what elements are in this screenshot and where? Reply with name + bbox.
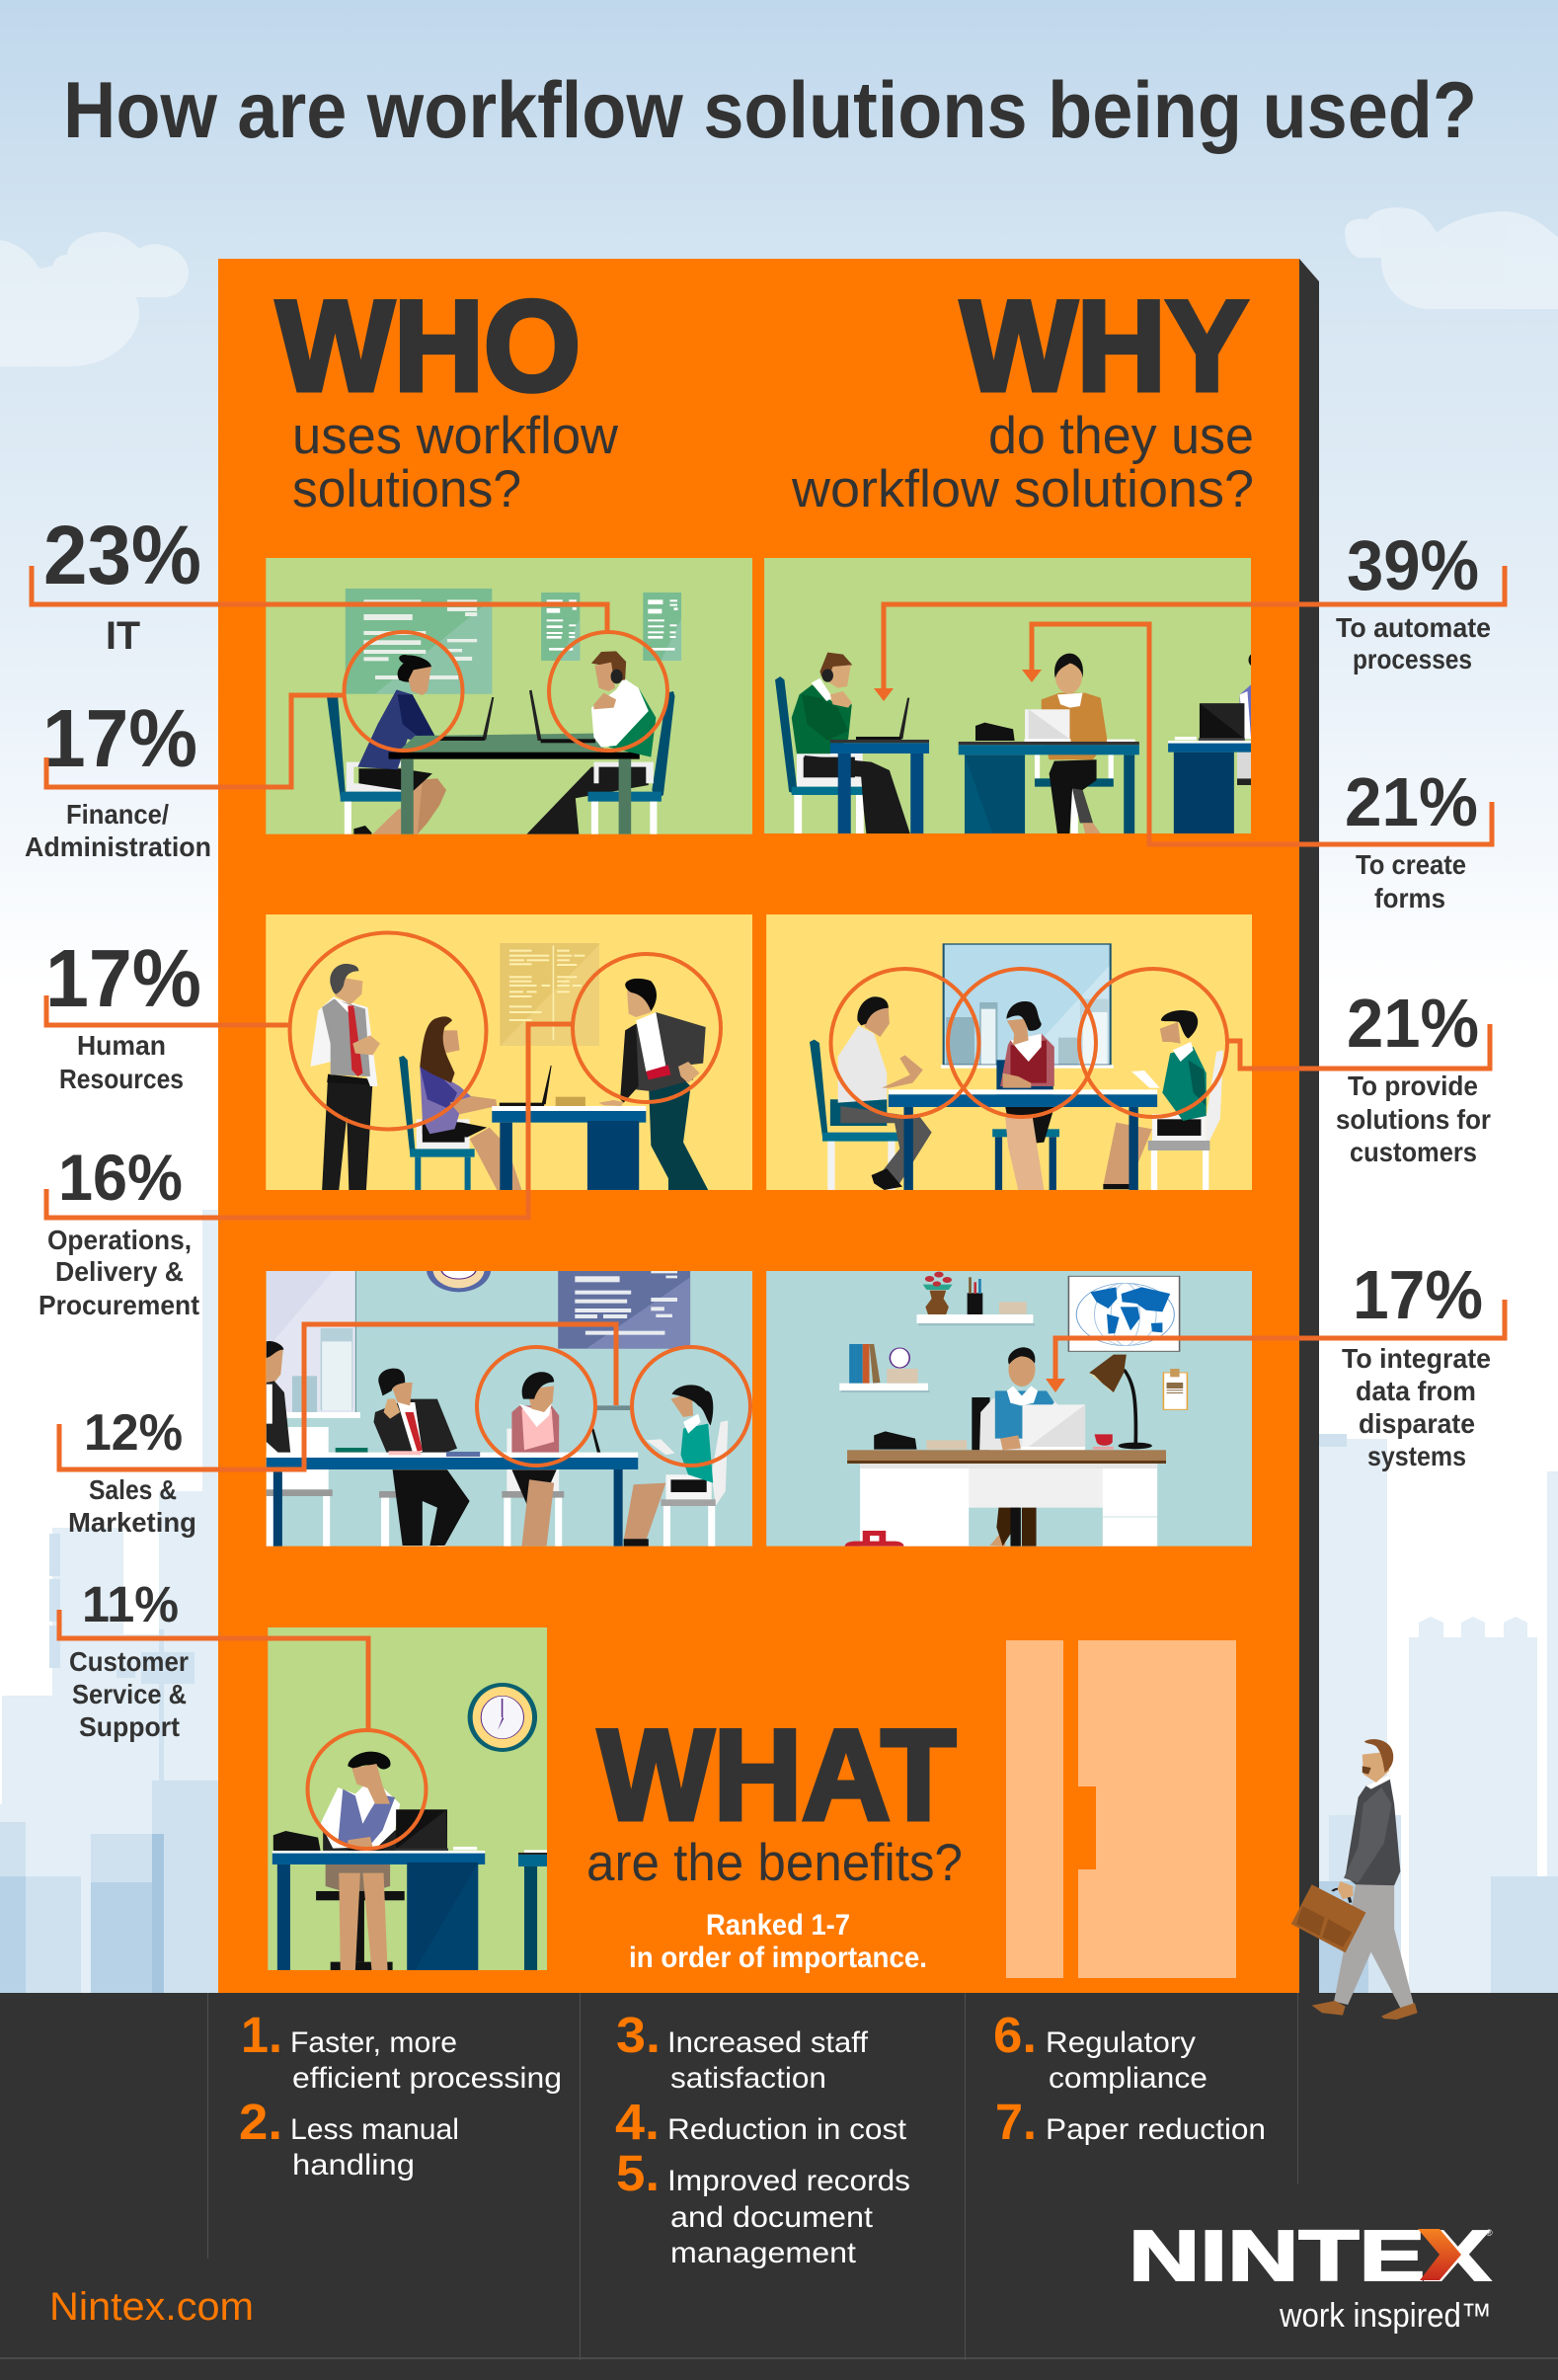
website link: Nintex.com: [49, 2285, 254, 2329]
benefits column 2: Increased staff: [667, 2026, 869, 2059]
stat: 11% customer service: [69, 1576, 189, 1742]
stat: 11% customer service: Support: [79, 1711, 180, 1742]
man thinking: [379, 1491, 397, 1498]
benefits column 1: Faster, more: [290, 2026, 457, 2059]
stat: 21% forms: forms: [1374, 883, 1445, 913]
woman centre: [996, 1060, 1053, 1094]
stat: 11% customer service: Customer: [69, 1646, 189, 1677]
footer band: [0, 1993, 1558, 2380]
stat: 17% human resources: Resources: [59, 1064, 184, 1094]
red bag: [863, 1531, 886, 1543]
scene: woman at desk with map: [766, 1271, 1252, 1547]
scene: headset staff at desks: [764, 558, 1257, 833]
laptop: [592, 1428, 600, 1453]
stat: 39% automate: To automate: [1336, 612, 1491, 643]
lamp: [1124, 1370, 1135, 1445]
stat: 23% IT: [43, 509, 201, 658]
stat: 17% finance: [25, 692, 211, 862]
heading: what: WHAT: [598, 1703, 956, 1847]
stat: 21% forms: [1345, 763, 1478, 913]
benefits column 1: efficient processing: [292, 2062, 562, 2095]
cup: [1094, 1434, 1113, 1446]
man in white shirt: [810, 1039, 827, 1138]
nintex logo: [1129, 2217, 1493, 2335]
seated woman: [372, 778, 446, 834]
stat: 16% operations: Delivery &: [55, 1256, 184, 1287]
benefits column 3: compliance: [1049, 2062, 1207, 2095]
left chair: [327, 692, 346, 798]
standing leaning man: [649, 1071, 708, 1190]
nintex logo: ®: [1486, 2228, 1493, 2238]
heading: who: [276, 274, 619, 518]
stat: 17% integrate: disparate: [1359, 1408, 1475, 1439]
window: [944, 944, 1111, 1065]
desk: [542, 1066, 552, 1104]
scene: three at table by window: [766, 914, 1252, 1190]
stat: 12% sales: 12%: [84, 1404, 183, 1462]
benefits column 2: 3.: [616, 2007, 661, 2063]
walking man with briefcase: [1291, 1739, 1418, 2020]
green sweater man: [775, 676, 797, 795]
benefits column 1: handling: [292, 2149, 415, 2182]
woman right: [1207, 1050, 1223, 1148]
wall clock: [427, 1271, 492, 1292]
stat: 21% customers: To provide: [1348, 1071, 1478, 1101]
stat: 17% human resources: 17%: [45, 932, 201, 1024]
clipboard: [1163, 1373, 1187, 1409]
skyline right: [1318, 1434, 1558, 1993]
callout: HR connector: [46, 932, 486, 1130]
benefits column 2: Reduction in cost: [667, 2113, 907, 2146]
heading: who: uses workflow: [292, 407, 619, 465]
stat: 21% customers: solutions for: [1336, 1104, 1491, 1135]
stat: 16% operations: Operations,: [47, 1225, 192, 1255]
shelves: [918, 1323, 1035, 1325]
stat: 17% integrate: 17%: [1353, 1256, 1483, 1333]
stat: 12% sales: Marketing: [68, 1507, 196, 1538]
callout: IT connector: [32, 566, 667, 751]
stat: 17% finance: 17%: [42, 692, 197, 784]
ranking note: in order of importance.: [629, 1942, 927, 1974]
benefits column 3: 6.: [993, 2007, 1037, 2063]
benefits column 2: satisfaction: [670, 2062, 826, 2095]
left chair and standing person: [267, 1427, 329, 1489]
stat: 12% sales: Sales &: [89, 1474, 177, 1505]
ranking note: Ranked 1-7: [706, 1909, 850, 1942]
benefits column 1: 1.: [241, 2007, 282, 2063]
stat: 11% customer service: 11%: [82, 1576, 179, 1632]
desk: [273, 1851, 485, 1854]
arrow: create forms: [1022, 624, 1492, 844]
stat: 12% sales: [68, 1404, 196, 1538]
stat: 16% operations: Procurement: [39, 1290, 199, 1320]
stat: 21% forms: 21%: [1345, 763, 1478, 840]
heading: who: solutions?: [292, 460, 521, 518]
benefits column 2: and document: [670, 2201, 874, 2234]
heading: why: workflow solutions?: [791, 460, 1254, 518]
benefits column 3: 7.: [995, 2094, 1037, 2150]
orange building panel: [218, 259, 1299, 1995]
stat: 17% integrate: [1342, 1256, 1491, 1471]
benefits column 3: [993, 2007, 1266, 2150]
heading: who: WHO: [276, 274, 581, 418]
ranking note: [629, 1909, 927, 1974]
scene: receptionist: [268, 1627, 547, 1970]
woman: [972, 1397, 990, 1450]
callout: operations connector: [46, 954, 721, 1218]
nintex logo: work inspired™: [1279, 2297, 1492, 2335]
benefits column 2: Improved records: [667, 2165, 910, 2197]
board: [558, 1271, 690, 1349]
stat: 17% human resources: [45, 932, 201, 1094]
stat: 11% customer service: Service &: [72, 1679, 187, 1709]
wall clock: [468, 1683, 537, 1752]
scene: HR meeting: [266, 914, 752, 1190]
benefits column 3: Paper reduction: [1046, 2113, 1266, 2146]
stat: 16% operations: [39, 1141, 199, 1320]
stat: 39% automate: [1336, 527, 1491, 674]
heading: what: are the benefits?: [586, 1834, 963, 1892]
heading: why: [791, 274, 1254, 518]
stat: 17% integrate: To integrate: [1342, 1343, 1491, 1374]
benefits column 2: 4.: [615, 2094, 660, 2150]
woman with paper: [712, 1420, 728, 1506]
callout: sales connector: [59, 1324, 750, 1469]
stat: 23% IT: 23%: [43, 509, 201, 601]
skyline left: [0, 1210, 218, 1995]
side table: [524, 1850, 547, 1854]
heading: why: WHY: [961, 274, 1248, 418]
seated woman: [399, 1056, 415, 1153]
far right person and desk: [1237, 778, 1251, 785]
benefits column 1: [239, 2007, 562, 2182]
stat: 21% customers: 21%: [1347, 985, 1479, 1062]
stat: 17% integrate: data from: [1356, 1376, 1476, 1406]
heading: why: do they use: [988, 407, 1254, 465]
stat: 39% automate: 39%: [1347, 527, 1479, 605]
stat: 21% customers: [1336, 985, 1491, 1167]
desk items: [273, 1831, 321, 1851]
seated man: [652, 691, 674, 800]
stat: 21% customers: customers: [1350, 1137, 1477, 1167]
map: [1068, 1276, 1180, 1351]
benefits column 1: Less manual: [290, 2113, 459, 2146]
stat: 39% automate: processes: [1353, 644, 1472, 674]
stat: 23% IT: IT: [106, 614, 140, 658]
table: [889, 1089, 1157, 1094]
orange blouse woman: [1035, 754, 1040, 779]
arrow: automate: [874, 566, 1505, 701]
scene: two colleagues with laptops: [266, 558, 752, 834]
long table: [267, 1453, 638, 1458]
door: [1006, 1640, 1236, 1978]
table and laptops: [398, 734, 606, 753]
stat: 17% human resources: Human: [77, 1030, 166, 1061]
benefits column 1: 2.: [239, 2094, 282, 2150]
benefits column 2: [615, 2007, 910, 2269]
callout: customer service connector: [59, 1610, 427, 1849]
stat: 17% integrate: systems: [1367, 1441, 1466, 1471]
benefits column 3: Regulatory: [1046, 2026, 1196, 2059]
stat: 17% finance: Finance/: [66, 799, 169, 830]
woman pink blouse: [506, 1429, 559, 1491]
stat: 17% finance: Administration: [25, 832, 211, 862]
callout: finance connector: [46, 632, 462, 787]
phone and books: [874, 1431, 917, 1450]
clouds: [0, 207, 1558, 366]
background sky: [0, 0, 1558, 988]
arrow: integrate data: [1046, 1300, 1505, 1392]
standing man: [322, 1074, 372, 1190]
stat: 16% operations: 16%: [58, 1141, 183, 1214]
books and papers: [336, 1448, 367, 1453]
callout: solutions for customers connector: [831, 969, 1490, 1117]
desk: [860, 1464, 1157, 1547]
nintex logo: NINTEX: [1129, 2217, 1491, 2296]
scene: long table with colleagues: [267, 1246, 752, 1547]
stat: 21% forms: To create: [1356, 849, 1466, 880]
benefits column 2: management: [670, 2237, 857, 2269]
receptionist: [323, 1830, 400, 1851]
building side wall: [1299, 259, 1319, 1995]
benefits column 2: 5.: [616, 2145, 660, 2201]
